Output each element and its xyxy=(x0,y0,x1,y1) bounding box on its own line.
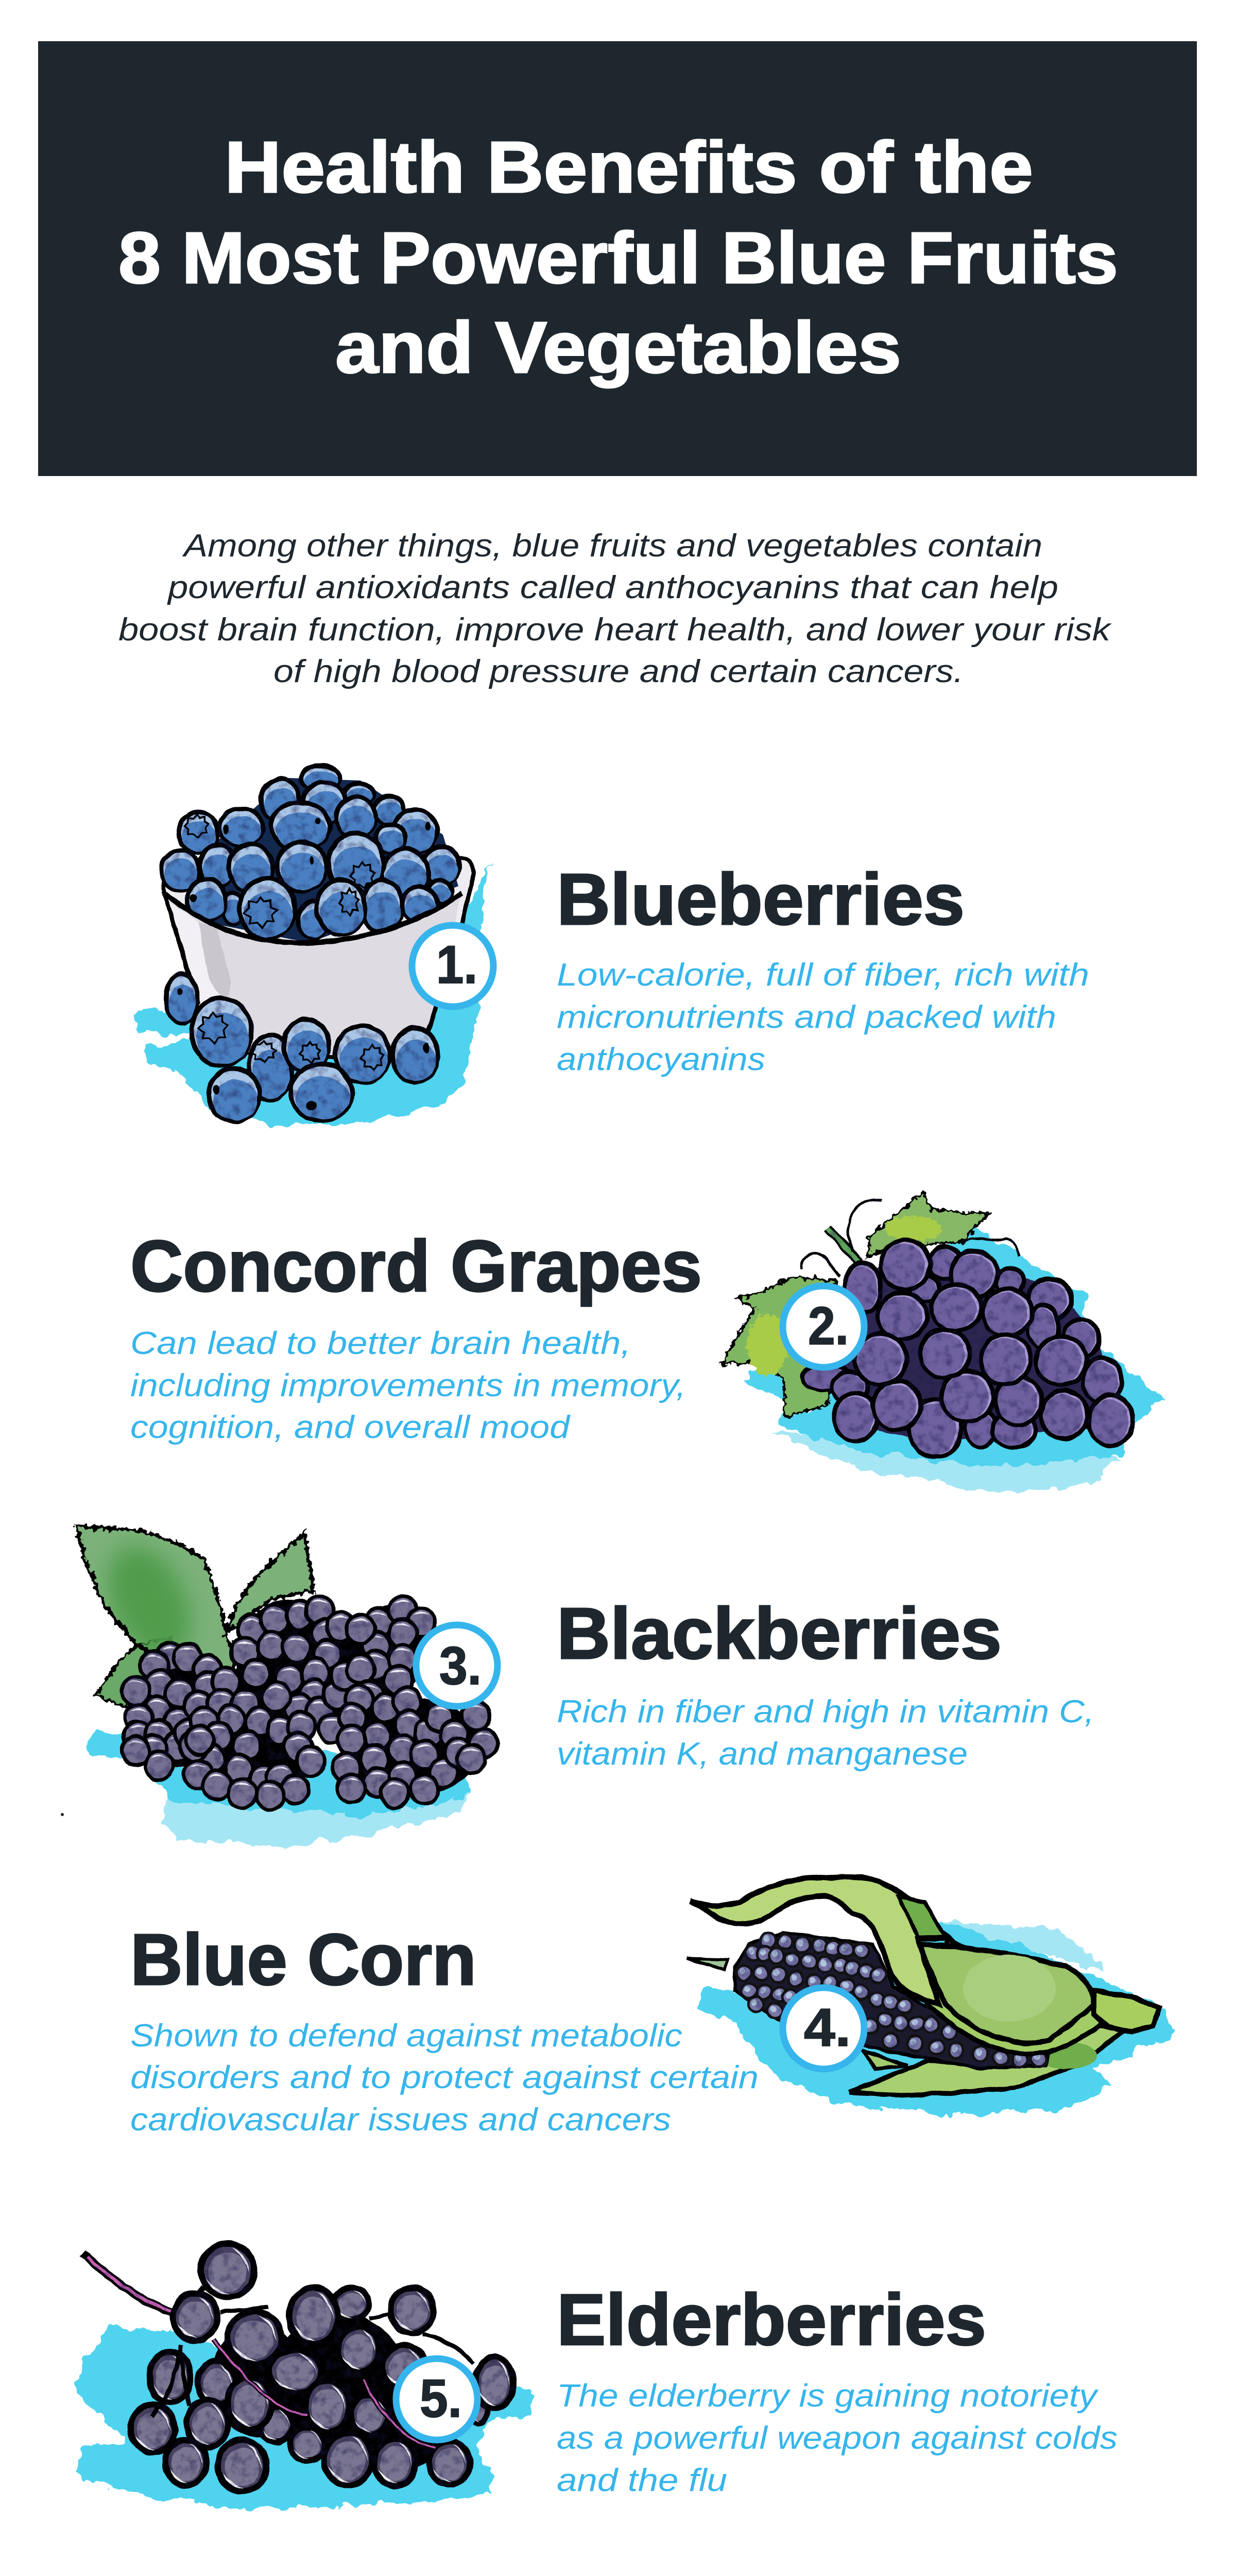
heading: Blackberries: Blackberries xyxy=(557,1592,1002,1674)
badge 5 xyxy=(396,2359,477,2440)
description: blackberries: Rich in fiber and high in vitamin C, xyxy=(557,1694,1094,1730)
description: elderberries: as a powerful weapon against colds xyxy=(557,2420,1118,2456)
description: blueberries xyxy=(557,957,1089,1077)
description: blue corn: disorders and to protect against certain xyxy=(130,2060,759,2095)
badge 4 xyxy=(783,1988,864,2069)
illustration: blackberries xyxy=(61,1526,497,1847)
description: blue corn xyxy=(130,2018,759,2138)
description: concord grapes: Can lead to better brain health, xyxy=(130,1326,631,1361)
panel: concord grapes xyxy=(130,1193,1162,1492)
illustration: bowl of blueberries xyxy=(135,766,490,1123)
panel: elderberries xyxy=(75,2244,1118,2509)
description: blueberries: Low-calorie, full of fiber, rich with xyxy=(557,957,1089,993)
intro text: powerful antioxidants called anthocyanins that can help xyxy=(167,570,1058,605)
title: 8 Most Powerful Blue Fruits xyxy=(118,217,1118,298)
heading: Blueberries: Blueberries xyxy=(557,858,965,940)
title xyxy=(118,126,1118,388)
intro text: of high blood pressure and certain cancers. xyxy=(273,654,964,689)
description: elderberries xyxy=(557,2378,1118,2498)
title: and Vegetables xyxy=(335,307,901,388)
title panel xyxy=(38,41,1197,476)
panel: blackberries xyxy=(61,1526,1094,1847)
description: blue corn: Shown to defend against metabolic xyxy=(130,2018,682,2054)
badge 5: 5. xyxy=(420,2369,462,2429)
description: concord grapes xyxy=(130,1326,686,1445)
heading: Elderberries: Elderberries xyxy=(557,2279,986,2360)
intro text: boost brain function, improve heart health, and lower your risk xyxy=(118,612,1112,648)
badge 3: 3. xyxy=(439,1636,482,1696)
badge 2 xyxy=(783,1286,864,1367)
badge 4: 4. xyxy=(804,1998,851,2058)
description: blackberries: vitamin K, and manganese xyxy=(557,1736,968,1772)
description: concord grapes: cognition, and overall mood xyxy=(130,1410,571,1445)
illustration: blue corn xyxy=(687,1877,1175,2115)
badge 1 xyxy=(412,925,493,1007)
heading: Blue Corn: Blue Corn xyxy=(130,1919,476,2000)
description: blueberries: anthocyanins xyxy=(557,1042,765,1077)
panel: blue corn xyxy=(130,1877,1175,2138)
heading: Concord Grapes: Concord Grapes xyxy=(130,1225,702,1307)
intro text: Among other things, blue fruits and vegetables contain xyxy=(182,528,1042,564)
badge 3 xyxy=(416,1625,497,1706)
panel: blueberries xyxy=(135,766,1089,1123)
badge 2: 2. xyxy=(808,1296,849,1356)
description: blue corn: cardiovascular issues and cancers xyxy=(130,2102,671,2138)
description: elderberries: The elderberry is gaining notoriety xyxy=(557,2378,1099,2414)
intro text xyxy=(118,528,1112,689)
description: blackberries xyxy=(557,1694,1094,1772)
description: elderberries: and the flu xyxy=(557,2463,727,2498)
title: Health Benefits of the xyxy=(225,126,1033,208)
illustration: grapes xyxy=(723,1193,1162,1492)
badge 1: 1. xyxy=(436,935,477,995)
description: blueberries: micronutrients and packed with xyxy=(557,999,1056,1035)
illustration: elderberries xyxy=(75,2244,532,2509)
description: concord grapes: including improvements in memory, xyxy=(130,1368,686,1403)
